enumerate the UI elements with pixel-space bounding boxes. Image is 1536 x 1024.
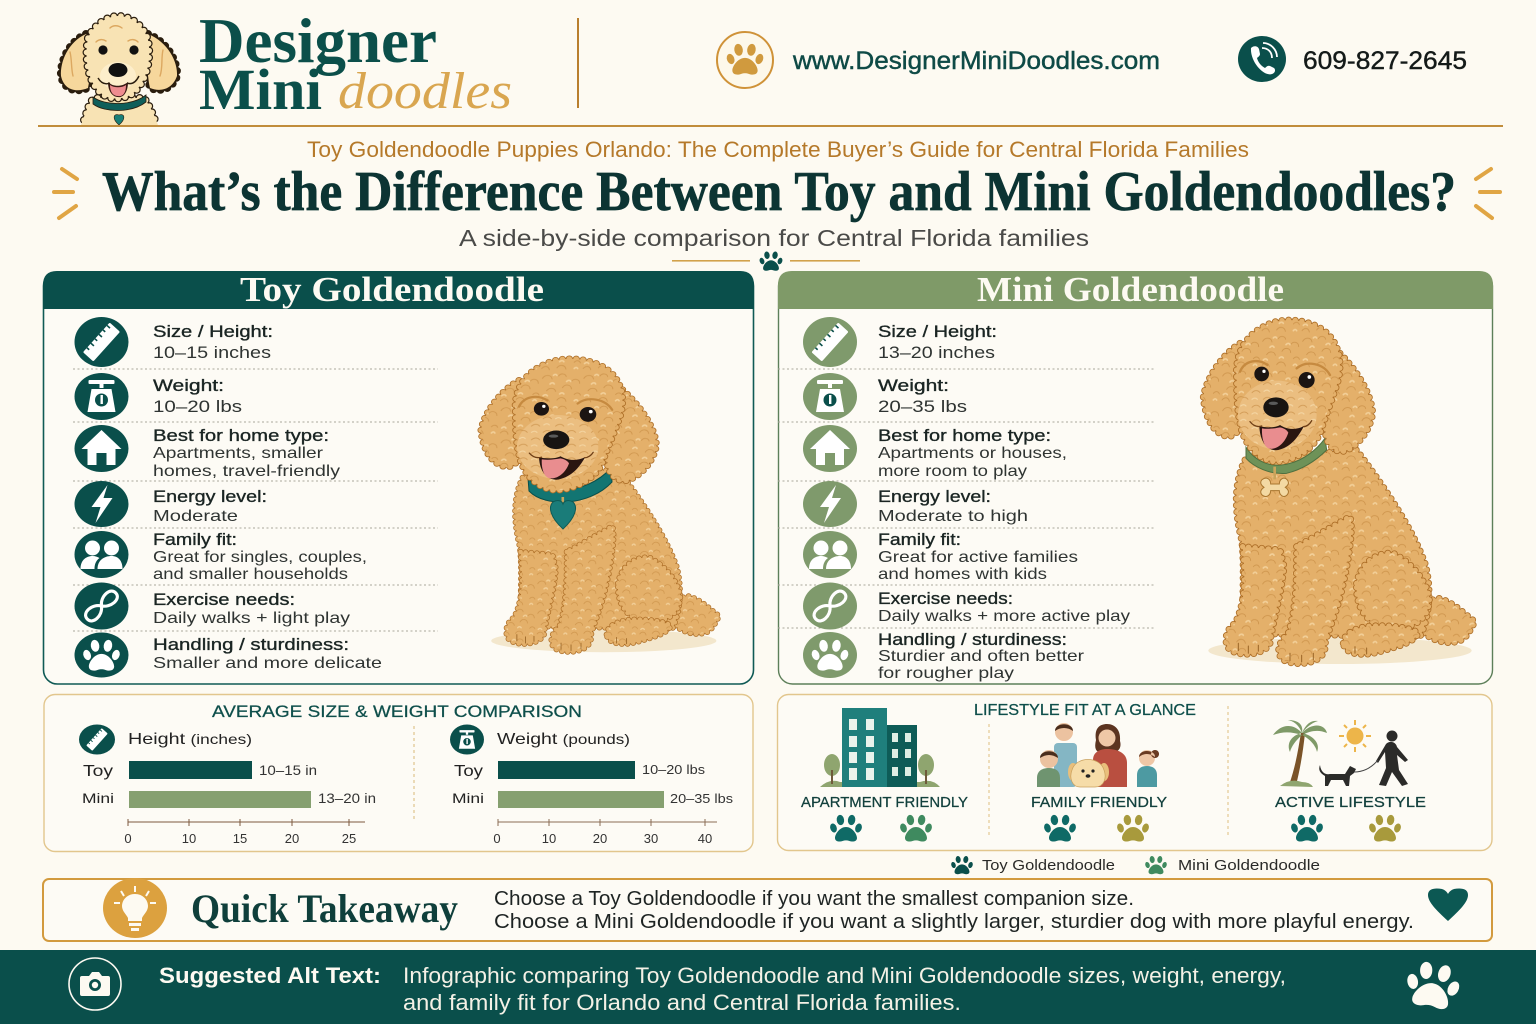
chart divider (413, 726, 415, 822)
panel heading: Mini Goldendoodle (977, 270, 1284, 309)
panel: Toy Goldendoodle (43, 270, 754, 684)
row separators (73, 369, 438, 631)
row: weight: Weight: (878, 376, 949, 395)
row: weight: 20–35 lbs (878, 397, 967, 416)
row: home type: Apartments or houses, (878, 445, 1067, 462)
bar chart: height (79, 724, 376, 846)
bar chart: height: 10 (182, 831, 196, 846)
alt text copy (403, 963, 1286, 1015)
row: family fit: Great for singles, couples, (153, 549, 367, 566)
bar chart: weight: 20 (593, 831, 607, 846)
title accent sparks: right (1476, 169, 1500, 218)
panel heading (778, 270, 1493, 309)
icon: white paw (1401, 958, 1465, 1012)
bar chart: weight (450, 724, 734, 846)
row: exercise needs: Exercise needs: (878, 589, 1013, 608)
row: size and height: Size / Height: (878, 322, 997, 341)
header rule (38, 125, 1503, 127)
row: family fit (803, 530, 1078, 583)
row: exercise needs (74, 582, 350, 630)
phone contact (1238, 36, 1467, 82)
bar chart: height: Mini (82, 790, 114, 806)
callout text (494, 888, 1414, 933)
panel: lifestyle fit at a glance (778, 694, 1492, 850)
column dividers (989, 706, 1228, 838)
label: active lifestyle: ACTIVE LIFESTYLE (1275, 794, 1426, 811)
row: energy level (803, 481, 1028, 527)
logo wordmark: Mini (199, 57, 322, 122)
icon: light bulb (103, 878, 167, 938)
bar chart: weight: 0 (493, 831, 501, 846)
illustration: toy goldendoodle (481, 359, 719, 652)
row: weight (803, 373, 967, 420)
bar chart: weight: 30 (644, 831, 658, 846)
bar chart: weight: Toy (454, 763, 483, 780)
row: size and height: 10–15 inches (153, 343, 271, 362)
row: home type: more room to play (878, 463, 1027, 480)
row: family fit: Family fit: (153, 530, 237, 549)
website address: www.DesignerMiniDoodles.com (792, 47, 1160, 75)
row: home type: homes, travel-friendly (153, 463, 340, 480)
bar chart: weight: 20–35 lbs (670, 791, 734, 806)
row: size and height (74, 317, 273, 367)
bar chart: height: Height (inches) (128, 731, 252, 748)
paws: active lifestyle (1290, 814, 1402, 842)
row: family fit: and homes with kids (878, 566, 1047, 583)
row: home type (74, 425, 340, 480)
callout text: Choose a Mini Goldendoodle if you want a slightly larger, sturdier dog with more playful energy. (494, 911, 1414, 933)
brand logo: Designer Mini Doodles (61, 5, 512, 125)
bar chart: height: 0 (124, 831, 132, 846)
icon: logo dog (61, 16, 177, 125)
row: exercise needs: Exercise needs: (153, 590, 295, 609)
row separators (778, 369, 1155, 628)
panel: Mini Goldendoodle (778, 270, 1493, 684)
website contact (717, 32, 1160, 88)
panel frame (44, 272, 754, 684)
row: family fit: Great for active families (878, 549, 1078, 566)
row: weight: Weight: (153, 376, 224, 395)
row: size and height: 13–20 inches (878, 343, 995, 362)
alt text label: Suggested Alt Text: (159, 963, 381, 988)
legend: Toy Goldendoodle (982, 857, 1115, 874)
row: exercise needs (803, 582, 1130, 630)
panel heading: Toy Goldendoodle (240, 270, 544, 309)
row: weight: 10–20 lbs (153, 397, 242, 416)
row: handling (74, 632, 382, 678)
panel heading: LIFESTYLE FIT AT A GLANCE (974, 702, 1196, 719)
logo wordmark: doodles (338, 63, 512, 120)
row: handling: for rougher play (878, 665, 1014, 682)
title accent sparks: left (54, 169, 77, 218)
callout heading: Quick Takeaway (191, 886, 458, 931)
bar chart: height: 15 (233, 831, 247, 846)
row: weight (74, 373, 242, 420)
row: energy level: Moderate to high (878, 508, 1028, 525)
row: home type: Apartments, smaller (153, 445, 324, 462)
row: energy level: Moderate (153, 508, 238, 525)
eyebrow headline: Toy Goldendoodle Puppies Orlando: The Complete Buyer’s Guide for Central Florida Families (307, 137, 1249, 162)
subtitle ornament with paw (672, 251, 860, 271)
row: handling: Sturdier and often better (878, 648, 1085, 665)
row: exercise needs: Daily walks + light play (153, 610, 350, 627)
icon: paw badge (717, 32, 773, 88)
callout: quick takeaway (43, 878, 1492, 941)
label: apartment friendly: APARTMENT FRIENDLY (801, 794, 968, 811)
bar chart: weight: 10 (542, 831, 556, 846)
row: energy level: Energy level: (153, 487, 267, 506)
row: family fit: and smaller households (153, 566, 348, 583)
bar chart: weight: Weight (pounds) (497, 731, 630, 748)
header divider (577, 18, 579, 108)
row: handling: Handling / sturdiness: (878, 630, 1067, 649)
row: handling (803, 630, 1085, 682)
callout text: Choose a Toy Goldendoodle if you want the smallest companion size. (494, 888, 1134, 910)
paws: apartment friendly (829, 814, 933, 842)
chart panel: average size and weight comparison (44, 694, 753, 852)
row: home type: Best for home type: (878, 426, 1051, 445)
logo wordmark: Designer (199, 5, 437, 76)
main title: What’s the Difference Between Toy and Mini Goldendoodles? (102, 161, 1456, 223)
panel frame (778, 272, 1492, 684)
phone number: 609-827-2645 (1303, 47, 1467, 75)
row: size and height (803, 317, 997, 367)
row: energy level (74, 481, 267, 527)
footer band: suggested alt text (0, 950, 1536, 1024)
row: handling: Smaller and more delicate (153, 655, 382, 672)
alt text copy: Infographic comparing Toy Goldendoodle and Mini Goldendoodle sizes, weight, energy, (403, 963, 1286, 988)
row: family fit: Family fit: (878, 530, 961, 549)
bar chart: height: Toy (83, 763, 113, 780)
alt text copy: and family fit for Orlando and Central Florida families. (403, 990, 961, 1015)
illustration: family with puppy (1037, 723, 1159, 787)
bar chart: height: 20 (285, 831, 299, 846)
row: size and height: Size / Height: (153, 322, 273, 341)
bar chart: weight: 40 (698, 831, 712, 846)
legend (950, 856, 1320, 874)
row: handling: Handling / sturdiness: (153, 635, 349, 654)
icon: camera (69, 958, 121, 1010)
chart heading: AVERAGE SIZE & WEIGHT COMPARISON (212, 702, 582, 721)
row: energy level: Energy level: (878, 487, 991, 506)
bar chart: weight: 10–20 lbs (642, 762, 706, 777)
icon: phone (1238, 36, 1286, 82)
legend: Mini Goldendoodle (1178, 857, 1320, 874)
row: home type (803, 425, 1067, 480)
row: exercise needs: Daily walks + more active play (878, 608, 1130, 625)
paws: family friendly (1043, 814, 1150, 842)
illustration: mini goldendoodle (1203, 320, 1475, 664)
logo wordmark (199, 5, 512, 122)
row: family fit (74, 530, 367, 583)
bar chart: height: 10–15 in (259, 763, 317, 778)
row: home type: Best for home type: (153, 426, 329, 445)
illustration: palm, sun and dog walker (1273, 720, 1408, 787)
bar chart: weight: Mini (452, 790, 484, 806)
label: family friendly: FAMILY FRIENDLY (1031, 794, 1167, 811)
panel heading (43, 270, 754, 309)
bar chart: height: 25 (342, 831, 356, 846)
bar chart: height: 13–20 in (318, 791, 376, 806)
illustration: apartment buildings (820, 708, 940, 787)
icon: heart (1428, 889, 1468, 921)
subtitle: A side-by-side comparison for Central Florida families (459, 225, 1089, 251)
